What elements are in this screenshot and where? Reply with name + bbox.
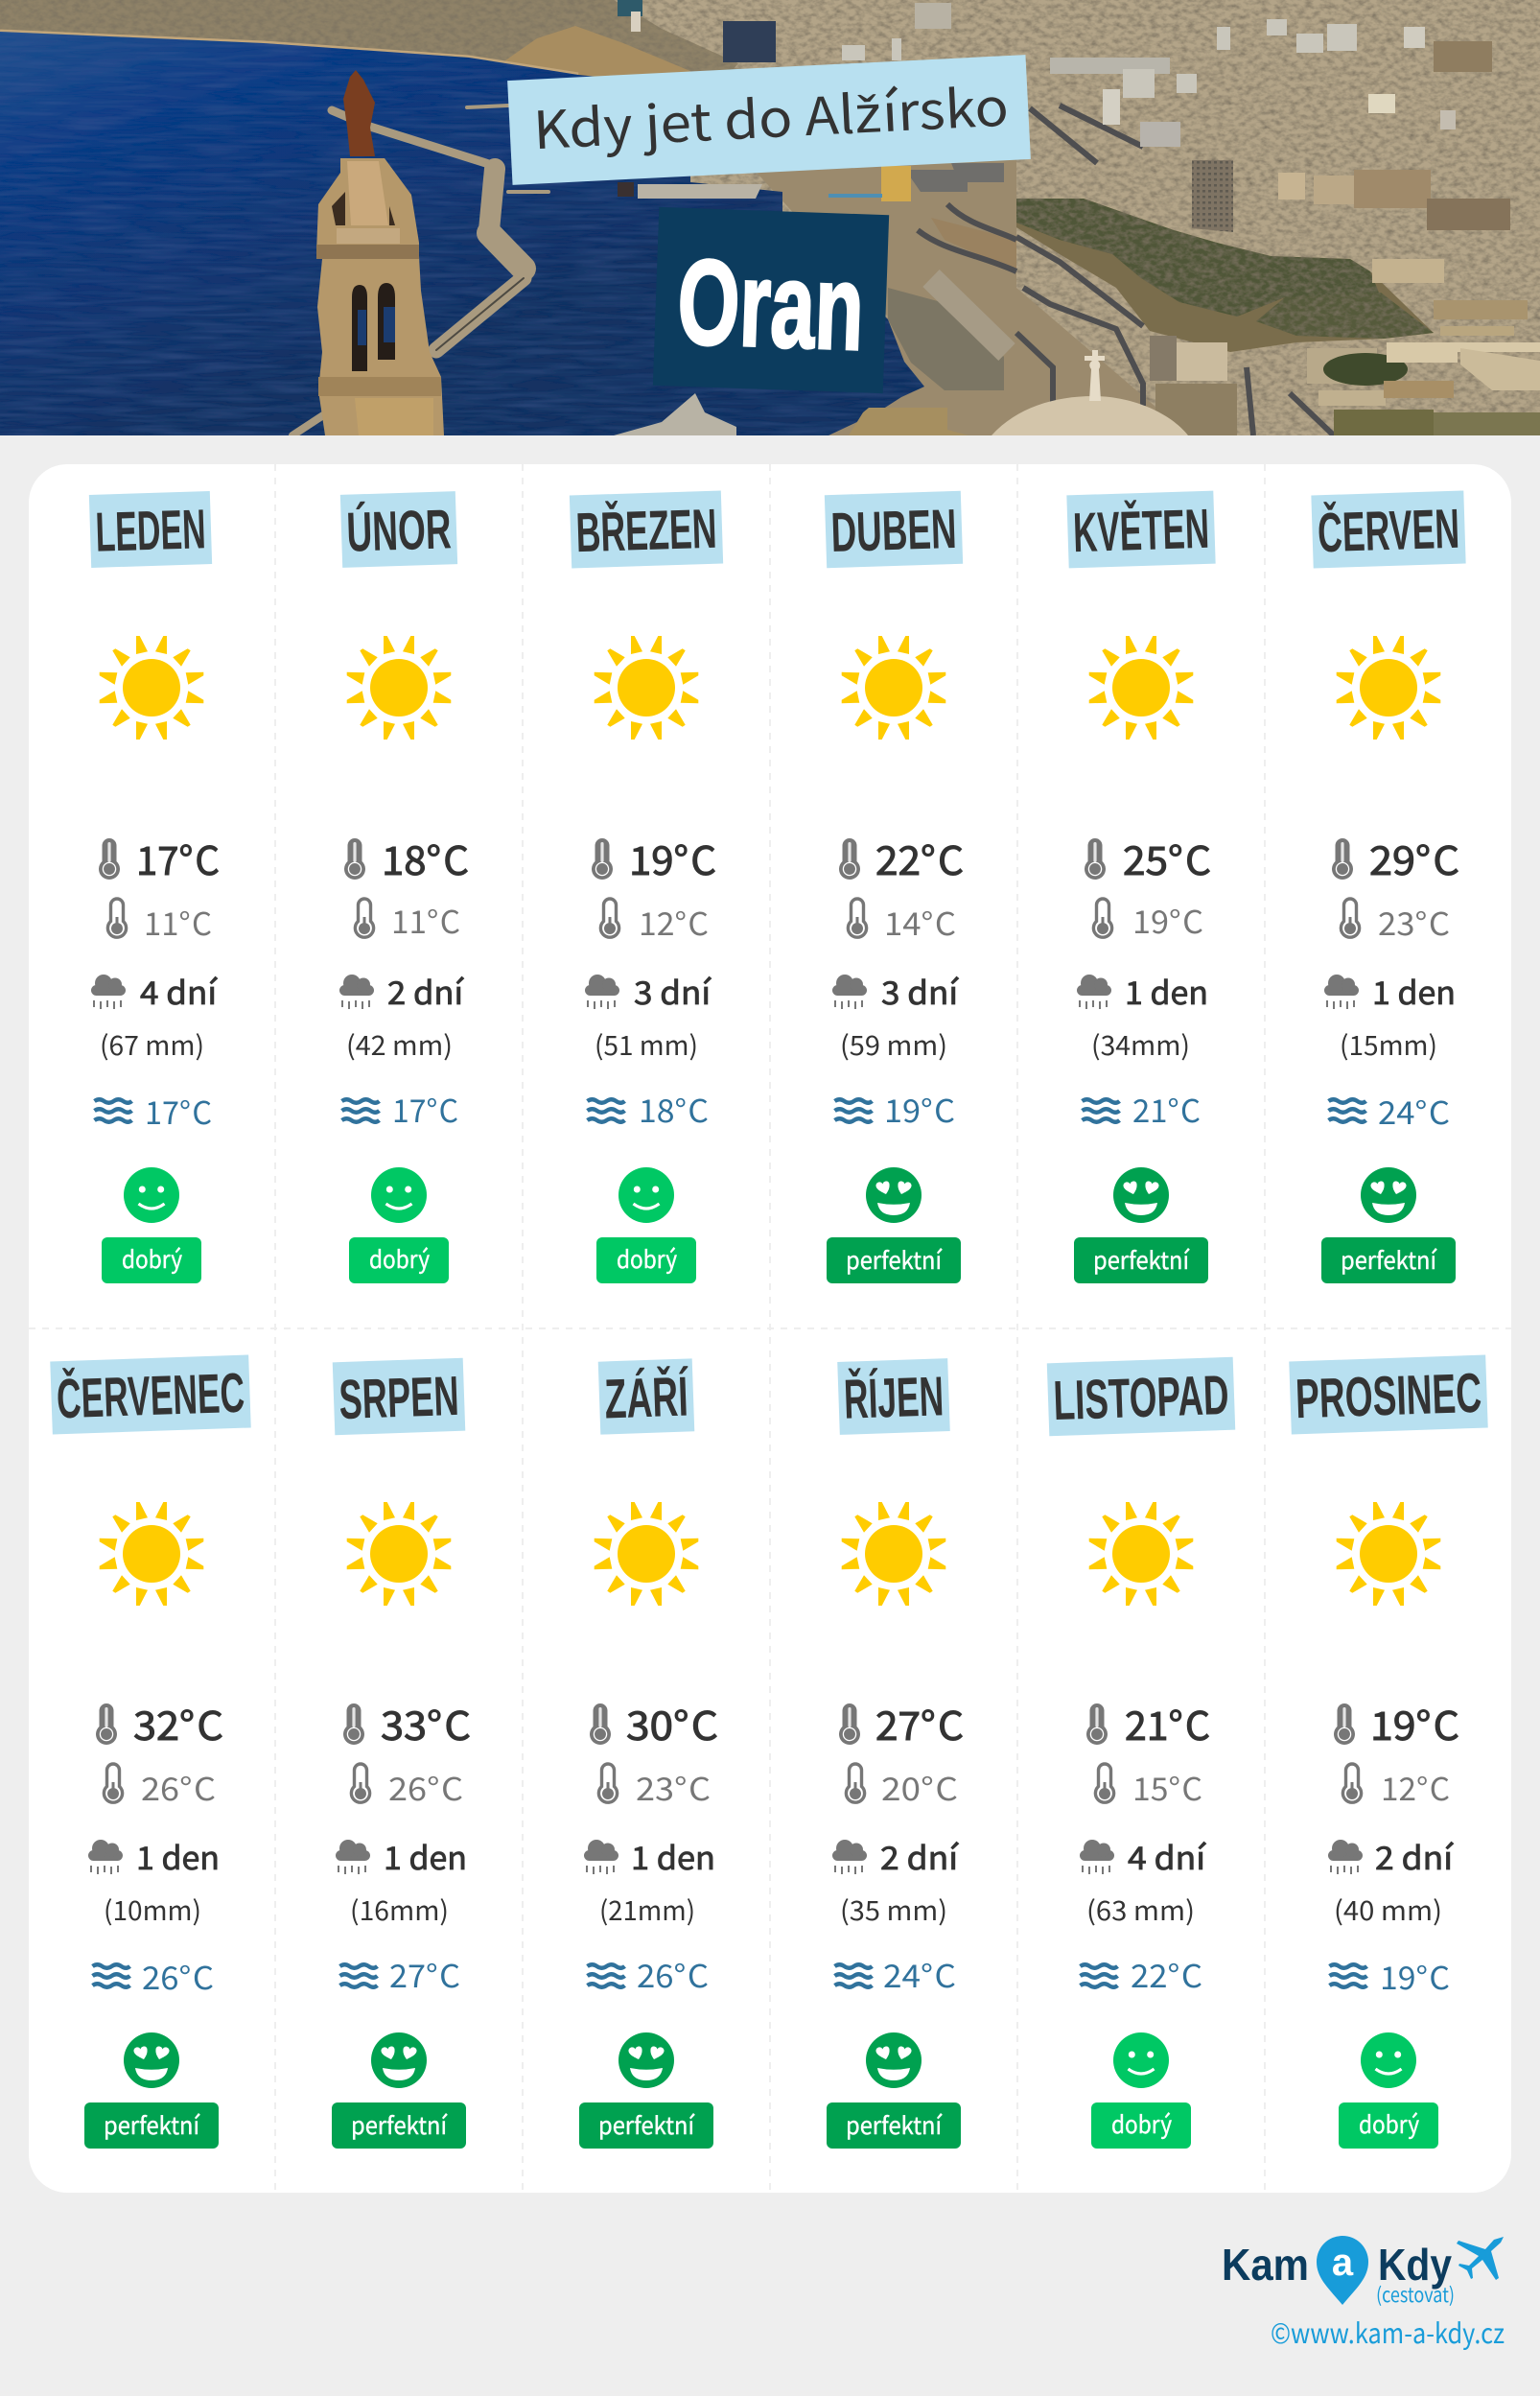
sunlit headland — [504, 26, 690, 77]
min temperature: 11° C — [144, 899, 212, 945]
roads — [918, 106, 1334, 435]
icon: thermometer low — [107, 899, 127, 937]
min temperature: 15° C — [1132, 1764, 1202, 1810]
sea temperature: 26° C — [637, 1951, 709, 1997]
icon: thermometer low — [104, 1764, 123, 1802]
icon: sun — [595, 636, 698, 740]
rating badge — [1074, 1237, 1208, 1283]
icon: sun — [842, 636, 945, 740]
icon: water waves — [1082, 1099, 1120, 1122]
icon: sun — [347, 1502, 451, 1606]
rating badge: perfektní — [846, 2107, 943, 2142]
subtitle label: Kdy jet do Alžírsko: Kdy jet do Al žírsko — [531, 65, 1010, 164]
sea through windows — [358, 307, 395, 345]
max temperature: 30° C — [626, 1694, 718, 1751]
icon: sun — [842, 1502, 945, 1606]
max temperature: 25° C — [1123, 829, 1211, 886]
icon: thermometer high — [96, 1703, 117, 1745]
header photo: aerial view of Oran — [0, 0, 1540, 435]
heading: Září — [598, 1358, 694, 1435]
sea temperature: 17° C — [392, 1086, 458, 1132]
min temperature: 11° C — [391, 897, 460, 943]
max temperature: 27° C — [875, 1694, 964, 1751]
max temperature: 19° C — [629, 829, 716, 886]
heading: Srpen — [333, 1358, 465, 1435]
icon: rain cloud — [1080, 1840, 1114, 1874]
heading: Září: ZÁŘÍ — [603, 1365, 690, 1430]
windows — [352, 283, 395, 371]
icon: sun — [347, 636, 451, 740]
icon: thermometer high — [592, 838, 613, 880]
icon: rain cloud — [336, 1840, 370, 1874]
icon: thermometer high — [590, 1703, 611, 1745]
tan tower group — [1434, 41, 1492, 72]
tree slope — [1016, 199, 1434, 352]
lower tower — [355, 398, 433, 435]
logo tagline: (cestovat) — [1376, 2280, 1455, 2309]
min temperature: 19° C — [1132, 897, 1203, 943]
tree band — [1016, 199, 1381, 317]
icon: smiley with heart eyes — [866, 2032, 922, 2088]
min temperature: 12° C — [1381, 1764, 1450, 1810]
max temperature: 21° C — [1125, 1694, 1210, 1751]
lantern openings — [332, 192, 395, 225]
heading: Únor: ÚNOR — [346, 498, 453, 564]
icon: thermometer low — [1342, 1764, 1362, 1802]
statue — [343, 70, 375, 156]
title label: Oran: Oran — [675, 234, 866, 375]
rating badge — [827, 2102, 961, 2149]
icon: thermometer low — [848, 899, 867, 937]
logo: Kam a Kdy — [1222, 2236, 1504, 2309]
heading: Listopad — [1047, 1357, 1235, 1436]
blue high-rise — [723, 21, 776, 62]
icon: rain cloud — [339, 975, 374, 1009]
grey port sheds — [905, 163, 1004, 192]
sea temperature: 19° C — [884, 1086, 955, 1132]
rating badge — [579, 2102, 713, 2149]
icon: smiley with heart eyes — [124, 2032, 179, 2088]
precipitation: (35 mm) — [840, 1891, 947, 1929]
precipitation: (59 mm) — [840, 1025, 947, 1064]
icon: rain cloud — [585, 975, 619, 1009]
icon: rain cloud — [1324, 975, 1359, 1009]
frieze — [337, 228, 400, 244]
icon: water waves — [587, 1099, 625, 1122]
icon: smiley — [1113, 2032, 1169, 2088]
rainy days: 4 dní — [140, 968, 218, 1014]
icon: thermometer high — [1332, 838, 1353, 880]
heading: Duben — [825, 491, 963, 568]
moored ship — [638, 184, 762, 199]
icon: thermometer high — [1334, 1703, 1355, 1745]
max temperature: 29° C — [1369, 829, 1459, 886]
icon: thermometer low — [846, 1764, 865, 1802]
month: Duben — [825, 491, 964, 1283]
yellow port building — [881, 166, 911, 201]
icon: thermometer high — [1085, 838, 1106, 880]
rating badge: perfektní — [1341, 1242, 1437, 1277]
month: Červen — [1311, 491, 1466, 1283]
icon: smiley — [371, 1167, 427, 1223]
heading: Listopad: LISTOPAD — [1052, 1364, 1230, 1432]
icon: thermometer low — [1341, 899, 1360, 937]
month: Květen — [1066, 491, 1216, 1283]
heading: Leden — [89, 491, 212, 568]
icon: water waves — [834, 1099, 873, 1122]
subtitle label: Kdy jet do Alžírsko — [507, 55, 1031, 185]
website credit: ©www.kam-a-kdy.cz — [1271, 2312, 1505, 2352]
lower cornice — [318, 377, 441, 396]
min temperature: 23° C — [1378, 899, 1450, 945]
rating badge — [1091, 2102, 1191, 2149]
sea temperature: 17° C — [145, 1088, 212, 1134]
icon: sun — [1337, 1502, 1440, 1606]
icon: thermometer low — [355, 899, 374, 937]
heading: Leden: LEDEN — [95, 498, 207, 564]
rainy days: 3 dní — [634, 968, 712, 1014]
icon: thermometer low — [600, 899, 619, 937]
month: Listopad — [1047, 1357, 1235, 2149]
dark vessel — [618, 182, 634, 197]
rating badge: dobrý — [1359, 2106, 1419, 2141]
rainy days: 1 den — [136, 1833, 220, 1879]
cornice — [316, 245, 419, 259]
rating badge: dobrý — [617, 1241, 677, 1276]
icon: water waves — [339, 1964, 378, 1987]
rating badge: dobrý — [369, 1241, 430, 1276]
rating badge: perfektní — [846, 1242, 943, 1277]
heading: Květen — [1066, 491, 1216, 568]
icon: sun — [1089, 636, 1193, 740]
icon: thermometer high — [839, 838, 860, 880]
icon: sun — [1337, 636, 1440, 740]
rating badge: perfektní — [598, 2107, 695, 2142]
panel: monthly calendar card — [29, 464, 1511, 2193]
heading: Březen: BŘEZEN — [575, 498, 718, 564]
precipitation: (51 mm) — [595, 1025, 698, 1064]
precipitation: (21mm) — [599, 1891, 695, 1929]
icon: thermometer low — [1093, 899, 1112, 937]
sea temperature: 19° C — [1380, 1953, 1450, 1999]
month: Prosinec — [1289, 1355, 1488, 2149]
icon: water waves — [834, 1964, 873, 1987]
sea temperature: 24° C — [883, 1951, 956, 1997]
precipitation: (10mm) — [104, 1891, 201, 1929]
icon: thermometer low — [351, 1764, 370, 1802]
sea temperature: 22° C — [1131, 1951, 1202, 1997]
rating badge — [102, 1237, 201, 1283]
icon: thermometer high — [1086, 1703, 1108, 1745]
sea temperature: 21° C — [1132, 1086, 1201, 1132]
blue walkway — [828, 194, 882, 198]
icon: thermometer high — [99, 838, 120, 880]
heading: Únor — [340, 491, 457, 568]
rainy days: 1 den — [1125, 968, 1208, 1014]
min temperature: 23° C — [636, 1764, 711, 1810]
heading: Srpen: SRPEN — [338, 1365, 460, 1431]
tall apartment block — [1192, 160, 1233, 232]
rainy days: 1 den — [384, 1833, 467, 1879]
rating badge — [1339, 2102, 1438, 2149]
rainy days: 2 dní — [880, 1833, 959, 1879]
max temperature: 17° C — [136, 829, 220, 886]
rating badge: perfektní — [351, 2107, 448, 2142]
precipitation: (63 mm) — [1086, 1891, 1195, 1929]
icon: smiley — [124, 1167, 179, 1223]
bottom port warehouse — [849, 408, 968, 435]
low-rise complex lower right — [1150, 336, 1540, 435]
sea temperature: 26° C — [142, 1953, 214, 1999]
month: Červenec — [50, 1355, 251, 2149]
rating badge — [332, 2102, 466, 2149]
logo pin with letter a: a — [1332, 2242, 1354, 2284]
icon: smiley — [1361, 2032, 1416, 2088]
rating badge — [349, 1237, 449, 1283]
rainy days: 2 dní — [1375, 1833, 1454, 1879]
heading: Květen: KVĚTEN — [1072, 498, 1210, 564]
icon: smiley with heart eyes — [866, 1167, 922, 1223]
icon: water waves — [587, 1964, 625, 1987]
max temperature: 18° C — [382, 829, 469, 886]
icon: thermometer high — [343, 1703, 364, 1745]
icon: airplane — [1457, 2237, 1504, 2280]
heading: Červenec — [50, 1355, 251, 1434]
month: Únor — [339, 491, 469, 1283]
heading: Duben: DUBEN — [830, 498, 958, 564]
icon: smiley with heart eyes — [371, 2032, 427, 2088]
icon: sun — [1089, 1502, 1193, 1606]
month: Září — [579, 1358, 718, 2149]
precipitation: (16mm) — [350, 1891, 449, 1929]
icon: sun — [100, 636, 203, 740]
precipitation: (34mm) — [1091, 1025, 1190, 1064]
heading: Říjen: ŘÍJEN — [843, 1365, 945, 1431]
rating badge — [596, 1237, 696, 1283]
sea — [0, 32, 924, 435]
white ship complex — [614, 393, 736, 435]
rating badge: dobrý — [1111, 2106, 1172, 2141]
white high-rise blocks — [618, 0, 1456, 147]
rainy days: 1 den — [631, 1833, 715, 1879]
lantern shaft — [347, 161, 388, 225]
month: Říjen — [827, 1358, 964, 2149]
logo pin with letter a — [1317, 2236, 1368, 2305]
hill above the coast — [0, 0, 738, 71]
icon: water waves — [92, 1964, 130, 1987]
sea temperature: 27° C — [389, 1951, 460, 1997]
heading: Červen — [1311, 491, 1466, 568]
icon: water waves — [1329, 1099, 1365, 1122]
logo word: Kam: Kam — [1222, 2240, 1309, 2290]
rating badge: dobrý — [122, 1241, 182, 1276]
rainy days: 4 dní — [1128, 1833, 1206, 1879]
logo word: Kdy: Kdy — [1378, 2240, 1452, 2290]
rainy days: 2 dní — [387, 968, 464, 1014]
lower trees — [1256, 293, 1434, 339]
max temperature: 32° C — [133, 1694, 223, 1751]
max temperature: 19° C — [1370, 1694, 1459, 1751]
month: Leden — [89, 491, 220, 1283]
min temperature: 20° C — [881, 1764, 958, 1810]
min temperature: 12° C — [639, 899, 709, 945]
icon: rain cloud — [832, 975, 867, 1009]
slope terrace — [931, 218, 1016, 271]
sea temperature: 24° C — [1378, 1088, 1450, 1134]
heading: Březen — [570, 491, 723, 568]
rainy days: 3 dní — [881, 968, 959, 1014]
icon: rain cloud — [832, 1840, 867, 1874]
max temperature: 22° C — [875, 829, 964, 886]
precipitation: (67 mm) — [100, 1025, 204, 1064]
heading: Říjen — [837, 1358, 950, 1435]
max temperature: 33° C — [381, 1694, 471, 1751]
dock yard — [888, 288, 1004, 390]
precipitation: (15mm) — [1340, 1025, 1437, 1064]
icon: thermometer high — [839, 1703, 860, 1745]
icon: smiley with heart eyes — [1361, 1167, 1416, 1223]
min temperature: 26° C — [388, 1764, 463, 1810]
month: Srpen — [332, 1358, 471, 2149]
icon: rain cloud — [1077, 975, 1111, 1009]
icon: smiley — [618, 1167, 674, 1223]
rating badge: perfektní — [104, 2107, 200, 2142]
rainy days: 1 den — [1372, 968, 1456, 1014]
icon: thermometer low — [598, 1764, 618, 1802]
lit shoreline — [0, 32, 578, 75]
icon: smiley with heart eyes — [1113, 1167, 1169, 1223]
icon: water waves — [341, 1099, 380, 1122]
icon: thermometer high — [344, 838, 365, 880]
icon: rain cloud — [584, 1840, 618, 1874]
icon: rain cloud — [88, 1840, 123, 1874]
rating badge — [827, 1237, 961, 1283]
precipitation: (42 mm) — [346, 1025, 453, 1064]
icon: water waves — [94, 1099, 132, 1122]
icon: thermometer low — [1095, 1764, 1114, 1802]
icon: sun — [100, 1502, 203, 1606]
dome with cross — [992, 350, 1188, 435]
rating badge — [84, 2102, 219, 2149]
icon: water waves — [1080, 1964, 1118, 1987]
precipitation: (40 mm) — [1334, 1891, 1442, 1929]
sea temperature: 18° C — [639, 1086, 709, 1132]
icon: rain cloud — [91, 975, 126, 1009]
icon: smiley with heart eyes — [618, 2032, 674, 2088]
jetty — [292, 106, 548, 435]
mid-city apartment blocks — [1278, 170, 1528, 336]
tower body — [316, 158, 444, 435]
port ground — [758, 159, 1155, 435]
month: Březen — [570, 491, 723, 1283]
icon: sun — [595, 1502, 698, 1606]
icon: water waves — [1329, 1964, 1367, 1987]
icon: rain cloud — [1328, 1840, 1363, 1874]
rating badge — [1321, 1237, 1456, 1283]
min temperature: 26° C — [141, 1764, 216, 1810]
title label: Oran — [653, 207, 889, 393]
heading: Červenec: ČERVENEC — [56, 1362, 245, 1430]
church tower with statue — [316, 70, 444, 435]
rating badge: perfektní — [1093, 1242, 1190, 1277]
min temperature: 14° C — [884, 899, 956, 945]
city background — [579, 0, 1540, 435]
dock sheds — [931, 278, 1007, 352]
